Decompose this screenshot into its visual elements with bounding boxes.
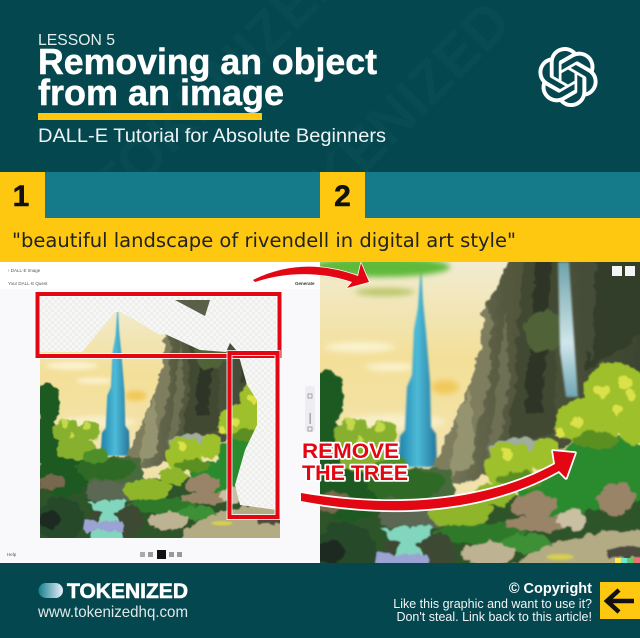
callout: remove the tree: [302, 439, 408, 485]
panel: result image: [320, 262, 640, 563]
editor top text: [8, 268, 315, 286]
panel: editor screenshot: [0, 262, 320, 563]
title: Removing an object: [38, 41, 377, 82]
title: [38, 41, 377, 113]
editor slider: [305, 386, 315, 432]
footer background: [0, 563, 640, 638]
editor top text: ‹ DALL·E Image: [8, 268, 41, 273]
callout: remove the tree: REMOVE: [302, 439, 399, 463]
subtitle: DALL-E Tutorial for Absolute Beginners: [38, 126, 386, 147]
copyright notice: © Copyright: [509, 581, 592, 597]
waterfall: [558, 262, 578, 397]
editor top text: Your DALL·E Quest: [8, 281, 48, 286]
copyright notice: Like this graphic and want to use it?: [393, 597, 592, 611]
footer logo: TOKENIZED: [67, 580, 188, 603]
step bar: [0, 172, 640, 218]
arrow box: [600, 582, 640, 619]
callout: remove the tree: THE TREE: [302, 461, 408, 485]
arrow: top to step 2: [253, 263, 369, 288]
step 2 badge: 2: [334, 180, 351, 213]
step 1 badge: 1: [13, 180, 29, 213]
colour signature: [615, 558, 640, 563]
green smear: [310, 257, 450, 296]
lesson label: LESSON 5: [38, 32, 115, 49]
step 2 badge: [320, 172, 365, 218]
title: from an image: [38, 72, 284, 113]
copyright notice: Don't steal. Link back to this article!: [396, 610, 592, 624]
prompt strip: [0, 218, 640, 262]
editor bottom toolbar: Help: [7, 552, 17, 557]
image with erased areas: [40, 297, 280, 538]
watermark: [78, 0, 523, 327]
icon: OpenAI logo: [538, 47, 598, 107]
header background: [0, 0, 640, 172]
red box: top selection: [38, 294, 280, 356]
prompt strip: "beautiful landscape of rivendell in digital art style": [12, 229, 516, 252]
copyright notice: [393, 581, 592, 624]
title underline: [38, 113, 262, 120]
editor bottom toolbar: [7, 550, 182, 559]
red box: right selection: [230, 353, 278, 517]
footer url: www.tokenizedhq.com: [37, 604, 188, 621]
arrow: bottom to tree: [301, 451, 575, 510]
editor top text: Generate: [295, 281, 315, 286]
step 1 badge: [0, 172, 45, 218]
image buttons: [612, 266, 635, 276]
